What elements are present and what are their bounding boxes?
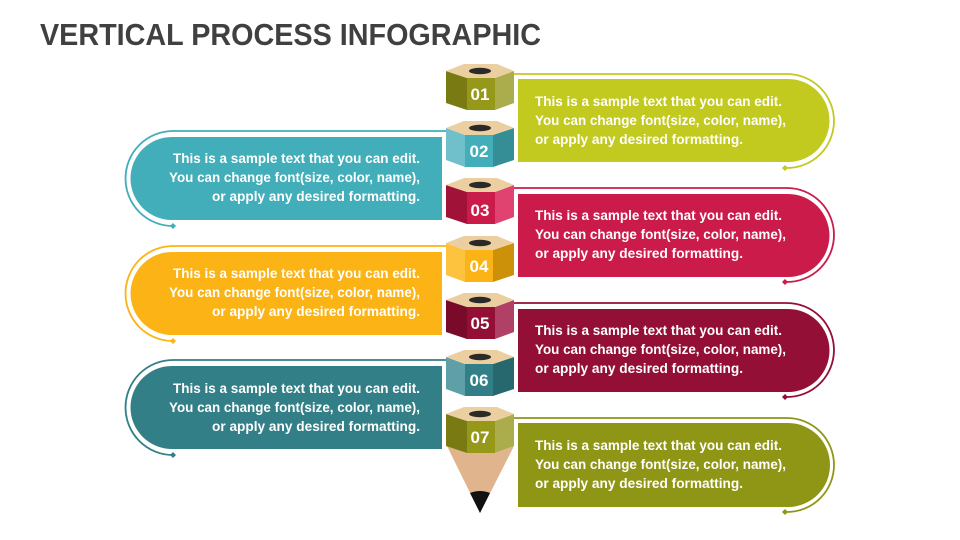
- panel: step 01: or apply any desired formatting.: [535, 131, 743, 147]
- icon: hexagon 01: [446, 64, 514, 110]
- panel: step 03: You can change font(size, color, name),: [535, 226, 786, 242]
- panel: step 04: This is a sample text that you can edit.: [173, 265, 420, 281]
- icon: hexagon 03: [446, 178, 514, 224]
- icon: hexagon 07: 07: [471, 428, 489, 447]
- panel: step 02: [126, 131, 448, 229]
- icon: hexagon 01: 01: [471, 85, 489, 104]
- icon: pencil tip: [447, 446, 514, 513]
- panel: step 06: This is a sample text that you can edit.: [173, 380, 420, 396]
- panel: step 01: This is a sample text that you can edit.: [535, 93, 782, 109]
- icon: hexagon 02: [446, 121, 514, 167]
- panel: step 04: You can change font(size, color, name),: [169, 284, 420, 300]
- panel: step 03: This is a sample text that you can edit.: [535, 207, 782, 223]
- panel: step 04: [126, 246, 448, 344]
- panel: step 06: or apply any desired formatting.: [212, 418, 420, 434]
- panel: step 07: You can change font(size, color, name),: [535, 456, 786, 472]
- panel: step 06: [126, 360, 448, 458]
- panel: step 07: [512, 418, 834, 515]
- icon: hexagon 04: [446, 236, 514, 282]
- icon: hexagon 05: [446, 293, 514, 339]
- panel: step 01: [512, 74, 834, 171]
- panel: step 03: [512, 188, 834, 285]
- panel: step 05: [512, 303, 834, 400]
- panel: step 02: You can change font(size, color, name),: [169, 169, 420, 185]
- icon: hexagon 02: 02: [470, 142, 488, 161]
- panel: step 02: or apply any desired formatting.: [212, 188, 420, 204]
- icon: hexagon 06: [446, 350, 514, 396]
- panel: step 03: or apply any desired formatting.: [535, 245, 743, 261]
- panel: step 05: You can change font(size, color, name),: [535, 341, 786, 357]
- panel: step 06: You can change font(size, color, name),: [169, 399, 420, 415]
- title: VERTICAL PROCESS INFOGRAPHIC: [40, 17, 541, 52]
- icon: hexagon 06: 06: [470, 371, 488, 390]
- panel: step 04: or apply any desired formatting.: [212, 303, 420, 319]
- panel: step 07: This is a sample text that you can edit.: [535, 437, 782, 453]
- icon: hexagon 04: 04: [470, 257, 489, 276]
- icon: hexagon 03: 03: [471, 201, 489, 220]
- panel: step 01: You can change font(size, color, name),: [535, 112, 786, 128]
- panel: step 07: or apply any desired formatting.: [535, 475, 743, 491]
- panel: step 05: or apply any desired formatting.: [535, 360, 743, 376]
- panel: step 05: This is a sample text that you can edit.: [535, 322, 782, 338]
- panel: step 02: This is a sample text that you can edit.: [173, 150, 420, 166]
- icon: hexagon 07: [446, 407, 514, 453]
- icon: hexagon 05: 05: [471, 314, 489, 333]
